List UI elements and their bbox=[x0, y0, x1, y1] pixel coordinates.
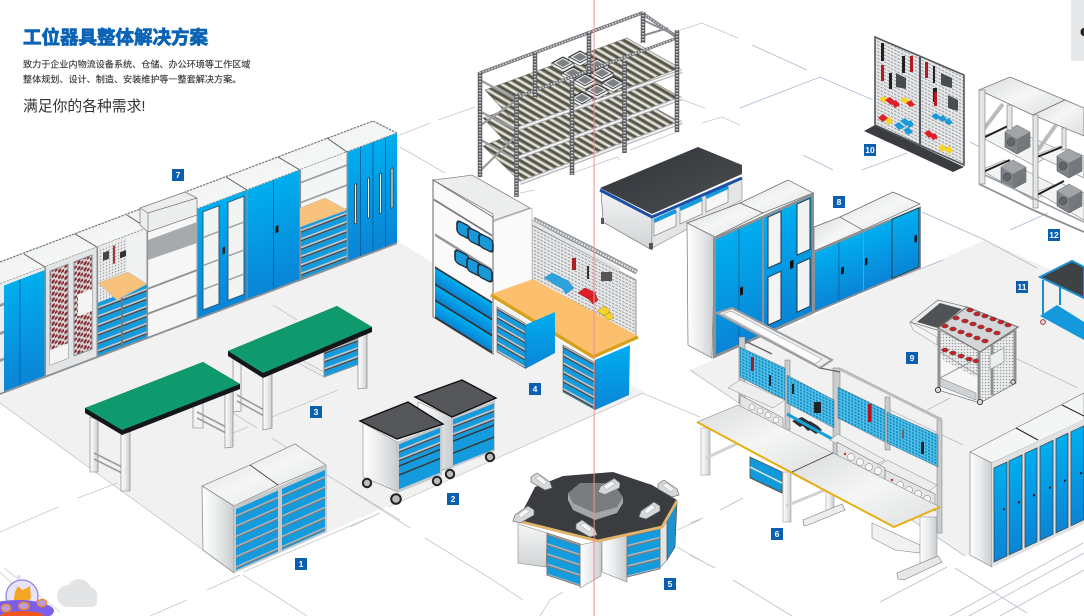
drawer unit B bbox=[563, 345, 630, 410]
number tag 10 bbox=[864, 144, 876, 156]
base panels bbox=[518, 524, 547, 567]
number tag 10: 10 bbox=[865, 145, 875, 155]
blue glass doors bbox=[197, 190, 247, 319]
center table bbox=[600, 147, 742, 250]
number tag 2 bbox=[447, 493, 459, 505]
top plate bbox=[938, 307, 1018, 352]
tall side bbox=[687, 223, 715, 358]
dark top bbox=[600, 147, 742, 214]
side bbox=[970, 452, 992, 567]
tool carts 2 bbox=[360, 380, 496, 504]
subheading: 满足你的各种需求! bbox=[23, 98, 146, 115]
bins row bbox=[792, 417, 822, 434]
number tag 6: 6 bbox=[775, 529, 780, 539]
low tops bbox=[814, 217, 863, 251]
cloud bbox=[57, 579, 98, 607]
number tag 7: 7 bbox=[176, 170, 181, 180]
tools bbox=[881, 43, 937, 106]
centre hub bbox=[568, 483, 623, 520]
number tag 12: 12 bbox=[1049, 230, 1059, 240]
side bbox=[202, 486, 234, 573]
number tag 9 bbox=[906, 352, 918, 364]
top bbox=[970, 393, 1084, 463]
number tag 3: 3 bbox=[314, 407, 319, 417]
cabinet front faces bbox=[0, 133, 397, 395]
number tag 7 bbox=[172, 169, 184, 181]
body bbox=[938, 330, 980, 403]
hanging tools bbox=[751, 357, 924, 454]
open shelves bbox=[148, 209, 197, 338]
tool trolley 9 bbox=[910, 300, 1018, 405]
number tag 1 bbox=[295, 558, 307, 570]
colored bins bbox=[879, 96, 953, 154]
frame posts bbox=[939, 330, 1015, 402]
right cart bbox=[415, 380, 496, 478]
wood edge bbox=[518, 501, 677, 541]
left cart bbox=[360, 402, 443, 504]
wood worktop bbox=[491, 279, 638, 356]
blue cart 11 bbox=[1040, 261, 1084, 340]
mesh shelf and header box bbox=[148, 222, 197, 260]
bins bbox=[552, 51, 624, 107]
octagonal bench 5 bbox=[513, 472, 679, 588]
locker cabinets bbox=[970, 393, 1084, 567]
cabinet top surface bbox=[0, 121, 397, 284]
doors bbox=[992, 420, 1084, 567]
number tag 5 bbox=[664, 578, 676, 590]
tool board and drawers bbox=[97, 238, 127, 303]
uprights and rails bbox=[739, 337, 942, 533]
table body bbox=[601, 190, 652, 250]
number tag 2: 2 bbox=[451, 494, 456, 504]
description text: 整体规划、设计、制造、安装维护等一整套解决方案。 bbox=[23, 74, 241, 84]
desk tops bbox=[697, 405, 833, 472]
number tag 5: 5 bbox=[668, 579, 673, 589]
title: 工位器具整体解决方案 bbox=[23, 27, 209, 48]
low fronts bbox=[813, 206, 921, 313]
pegboard stand 10 bbox=[864, 37, 964, 172]
tower top bbox=[433, 175, 530, 226]
tall tops bbox=[687, 203, 763, 237]
assembly workbench 6 bbox=[697, 308, 942, 580]
roller tiers bbox=[483, 38, 680, 183]
under-desk parts bbox=[701, 428, 942, 580]
drawers bbox=[234, 465, 327, 573]
shelf rack 12 bbox=[979, 77, 1084, 232]
open shelf with drawers bbox=[300, 152, 347, 226]
flow rack bbox=[480, 12, 682, 197]
number tag 11 bbox=[1016, 281, 1028, 293]
boards bbox=[875, 37, 964, 165]
blue pegboards bbox=[740, 347, 938, 467]
posts bbox=[979, 90, 1066, 208]
floor: left zone bbox=[0, 240, 645, 573]
workbench 4 bbox=[433, 175, 638, 410]
tray bbox=[910, 300, 967, 330]
pegboard bbox=[515, 213, 637, 336]
lower shelves bbox=[981, 127, 1060, 165]
vises bbox=[513, 473, 679, 537]
right table bbox=[228, 306, 372, 430]
power strips bbox=[740, 395, 935, 511]
drawer cabinet 1 bbox=[202, 444, 327, 573]
corner tab bbox=[1071, 0, 1084, 61]
dark bars bbox=[983, 125, 1064, 195]
wheels bbox=[935, 380, 1015, 405]
number tag 8 bbox=[833, 196, 845, 208]
bins on board bbox=[544, 273, 574, 294]
rack frame bbox=[480, 12, 682, 197]
sliding doors bbox=[347, 133, 397, 262]
light frame bbox=[717, 308, 840, 372]
dark top bbox=[518, 472, 677, 540]
tower side bbox=[493, 208, 532, 296]
base bbox=[864, 125, 964, 172]
tall fronts bbox=[713, 192, 814, 359]
left table bbox=[85, 362, 240, 491]
glass doors with tool holders bbox=[45, 247, 97, 377]
posts bbox=[44, 152, 348, 378]
number tag 4 bbox=[529, 383, 541, 395]
number tag 4: 4 bbox=[533, 384, 538, 394]
cabinets 8 bbox=[687, 180, 921, 359]
blue solid doors bbox=[247, 170, 300, 300]
blue doors bbox=[4, 270, 45, 391]
wood counters bbox=[98, 272, 147, 300]
boxes bbox=[1001, 125, 1082, 213]
floor: right zone bbox=[690, 240, 1084, 556]
number tag 1: 1 bbox=[299, 559, 304, 569]
bins bbox=[455, 220, 493, 283]
hanging tools bbox=[572, 258, 612, 281]
cabinet row 7 bbox=[0, 121, 397, 395]
mascot: cat in UFO bbox=[0, 568, 60, 616]
blue edge bbox=[600, 178, 742, 217]
number tag 12 bbox=[1048, 229, 1060, 241]
red tool holders bbox=[942, 308, 1011, 363]
drawer unit A bbox=[497, 307, 555, 369]
number tag 6 bbox=[771, 528, 783, 540]
drawer units bbox=[547, 533, 580, 586]
small shelves bbox=[728, 380, 785, 408]
number tag 3 bbox=[310, 406, 322, 418]
top bbox=[202, 444, 326, 506]
tops bbox=[979, 77, 1065, 115]
number tag 8: 8 bbox=[837, 197, 842, 207]
vertical red guide line bbox=[594, 0, 595, 616]
tower front bbox=[433, 180, 493, 354]
number tag 11: 11 bbox=[1018, 282, 1027, 292]
number tag 9: 9 bbox=[910, 353, 915, 363]
description text bbox=[23, 58, 250, 84]
workbench tables 3 bbox=[85, 306, 372, 491]
description text: 致力于企业内物流设备系统、仓储、办公环境等工作区域 bbox=[23, 58, 250, 70]
